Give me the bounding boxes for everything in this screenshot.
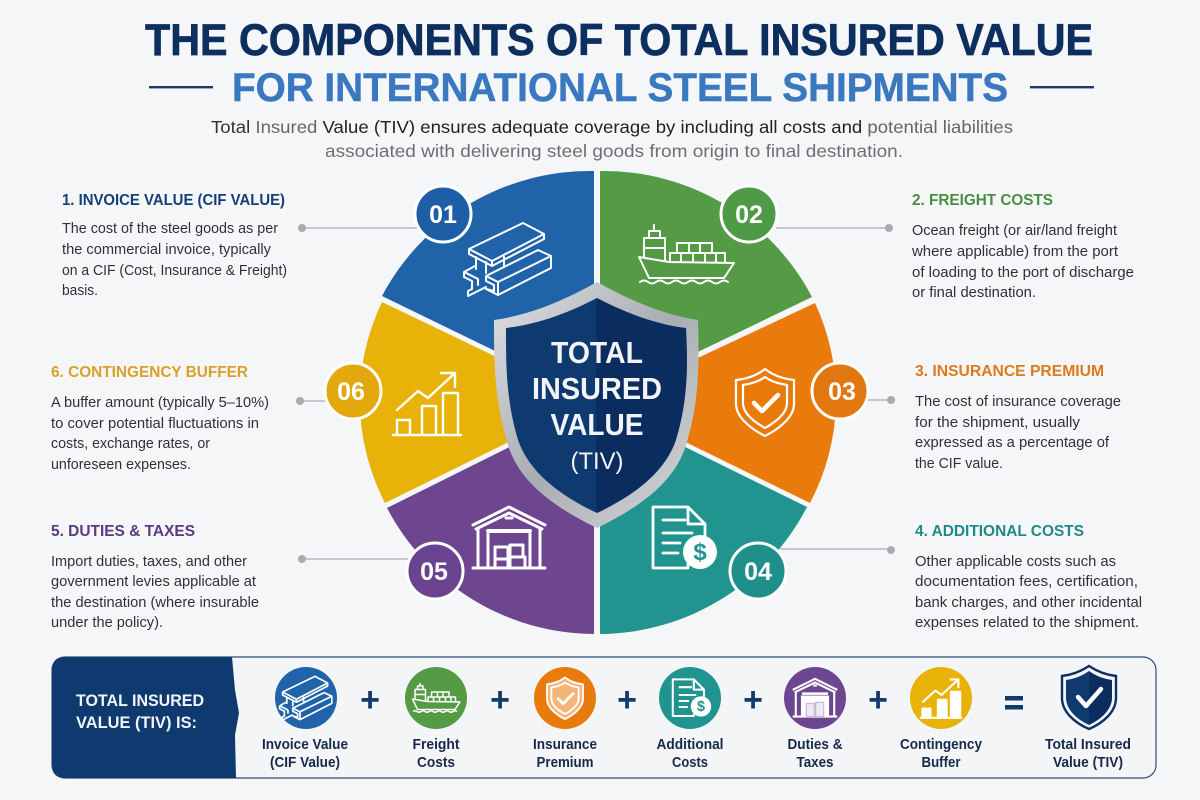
plus sign: + <box>868 681 888 719</box>
formula label tab <box>52 657 239 778</box>
text block 6: contingency buffer <box>51 364 269 473</box>
text block 5: duties and taxes: government levies applicable at <box>51 574 256 590</box>
term: invoice value: (CIF Value) <box>270 754 340 771</box>
term: contingency buffer: Contingency <box>900 736 983 753</box>
plus sign: + <box>490 681 510 719</box>
formula panel <box>52 657 1156 778</box>
badge 02: 02 <box>735 201 763 229</box>
text block 4: additional costs <box>915 523 1142 631</box>
text block 1: invoice value: the commercial invoice, typically <box>62 242 272 258</box>
text block 5: duties and taxes <box>51 523 259 631</box>
text block 5: duties and taxes: Import duties, taxes, and other <box>51 554 247 570</box>
text block 4: additional costs: Other applicable costs such as <box>915 554 1116 570</box>
term: contingency buffer: Buffer <box>922 754 961 771</box>
badge 06 <box>325 363 381 419</box>
term: contingency buffer <box>900 667 983 771</box>
badge 04: 04 <box>744 558 772 586</box>
badge 05 <box>407 543 463 599</box>
segment 3: insurance premium <box>604 303 836 503</box>
connector lines <box>296 224 895 563</box>
badge 01 <box>415 186 471 242</box>
central shield: TOTAL <box>551 335 643 370</box>
text block 3: insurance premium: 3. INSURANCE PREMIUM <box>915 363 1104 380</box>
text block 2: freight costs: where applicable) from the port <box>911 244 1118 260</box>
text block 4: additional costs: bank charges, and other incidental <box>915 595 1142 611</box>
text block 3: insurance premium: expressed as a percentage of <box>915 435 1110 451</box>
text block 3: insurance premium: the CIF value. <box>915 456 1003 472</box>
icon: growth chart <box>393 373 461 435</box>
segment 4: additional costs <box>600 405 807 634</box>
segment 5: duties and taxes <box>387 405 594 634</box>
formula label tab: VALUE (TIV) IS: <box>76 713 197 732</box>
badge 04 <box>730 543 786 599</box>
text block 1: invoice value <box>62 192 287 299</box>
central shield: INSURED <box>532 371 662 406</box>
icon: shield with check <box>736 369 794 436</box>
plus sign: + <box>360 681 380 719</box>
equals sign <box>1005 696 1023 710</box>
text block 3: insurance premium: for the shipment, usually <box>915 415 1081 431</box>
text block 3: insurance premium <box>915 363 1121 472</box>
badge 01: 01 <box>429 201 457 229</box>
term: freight costs: Freight <box>412 736 460 753</box>
text block 6: contingency buffer: A buffer amount (typically 5–10%) <box>51 395 269 411</box>
text block 2: freight costs: 2. FREIGHT COSTS <box>912 192 1053 209</box>
badge 05: 05 <box>420 558 448 586</box>
result: total insured value shield <box>1045 666 1131 771</box>
badge 06: 06 <box>337 378 365 406</box>
text block 6: contingency buffer: unforeseen expenses. <box>51 457 191 473</box>
central shield: VALUE <box>550 407 644 442</box>
text block 2: freight costs: or final destination. <box>912 285 1036 301</box>
icon: steel beams <box>464 223 551 296</box>
formula label tab: TOTAL INSURED <box>76 691 204 710</box>
text block 4: additional costs: expenses related to the shipment. <box>915 615 1139 631</box>
intro text: Total Insured Value (TIV) ensures adequate coverage by including all costs and potential liabilities <box>211 117 1013 137</box>
text block 2: freight costs: of loading to the port of discharge <box>912 265 1134 281</box>
term: additional costs: Costs <box>672 754 708 771</box>
text block 6: contingency buffer: to cover potential fluctuations in <box>51 416 259 432</box>
badge 03 <box>812 363 868 419</box>
result: total insured value shield: Total Insured <box>1045 736 1131 753</box>
term: freight costs <box>405 667 467 771</box>
title: THE COMPONENTS OF TOTAL INSURED VALUE <box>145 16 1093 65</box>
text block 5: duties and taxes: under the policy). <box>51 615 163 631</box>
term: duties and taxes <box>784 667 846 771</box>
icon: cargo ship <box>639 225 734 284</box>
text block 1: invoice value: 1. INVOICE VALUE (CIF VALUE) <box>62 192 285 209</box>
term: insurance premium <box>533 667 597 771</box>
segment 6: contingency buffer <box>360 302 590 503</box>
term: insurance premium: Premium <box>536 754 594 771</box>
badge 02 <box>721 186 777 242</box>
segment 1: invoice value <box>382 171 594 399</box>
term: invoice value <box>262 667 348 771</box>
icon: warehouse <box>473 507 545 568</box>
segment 2: freight costs <box>600 171 812 399</box>
term: insurance premium: Insurance <box>533 736 597 753</box>
term: freight costs: Costs <box>417 754 455 771</box>
text block 1: invoice value: on a CIF (Cost, Insurance & Freight) <box>62 263 287 279</box>
intro text <box>211 117 1013 161</box>
text block 2: freight costs: Ocean freight (or air/land freight <box>912 223 1117 239</box>
intro text: associated with delivering steel goods from origin to final destination. <box>325 141 903 161</box>
term: duties and taxes: Duties & <box>788 736 843 753</box>
central shield <box>494 282 699 528</box>
term: additional costs <box>656 667 724 771</box>
text block 5: duties and taxes: 5. DUTIES & TAXES <box>51 523 195 540</box>
badge 03: 03 <box>828 378 856 406</box>
text block 1: invoice value: basis. <box>62 283 98 299</box>
plus sign: + <box>743 681 763 719</box>
text block 6: contingency buffer: 6. CONTINGENCY BUFFER <box>51 364 248 381</box>
text block 6: contingency buffer: costs, exchange rates, or <box>51 436 210 452</box>
term: duties and taxes: Taxes <box>796 754 834 771</box>
text block 3: insurance premium: The cost of insurance coverage <box>915 394 1121 410</box>
subtitle heading: FOR INTERNATIONAL STEEL SHIPMENTS <box>232 66 1008 110</box>
icon: document with dollar coin <box>653 507 717 569</box>
text block 4: additional costs: 4. ADDITIONAL COSTS <box>915 523 1084 540</box>
result: total insured value shield: Value (TIV) <box>1053 754 1123 771</box>
plus sign: + <box>617 681 637 719</box>
wheel of six components <box>325 171 868 634</box>
text block 5: duties and taxes: the destination (where insurable <box>51 595 259 611</box>
text block 2: freight costs <box>911 192 1134 301</box>
term: invoice value: Invoice Value <box>262 736 348 753</box>
central shield: (TIV) <box>570 448 624 475</box>
text block 4: additional costs: documentation fees, certification, <box>915 574 1138 590</box>
term: additional costs: Additional <box>656 736 724 753</box>
text block 1: invoice value: The cost of the steel goods as per <box>62 221 278 237</box>
